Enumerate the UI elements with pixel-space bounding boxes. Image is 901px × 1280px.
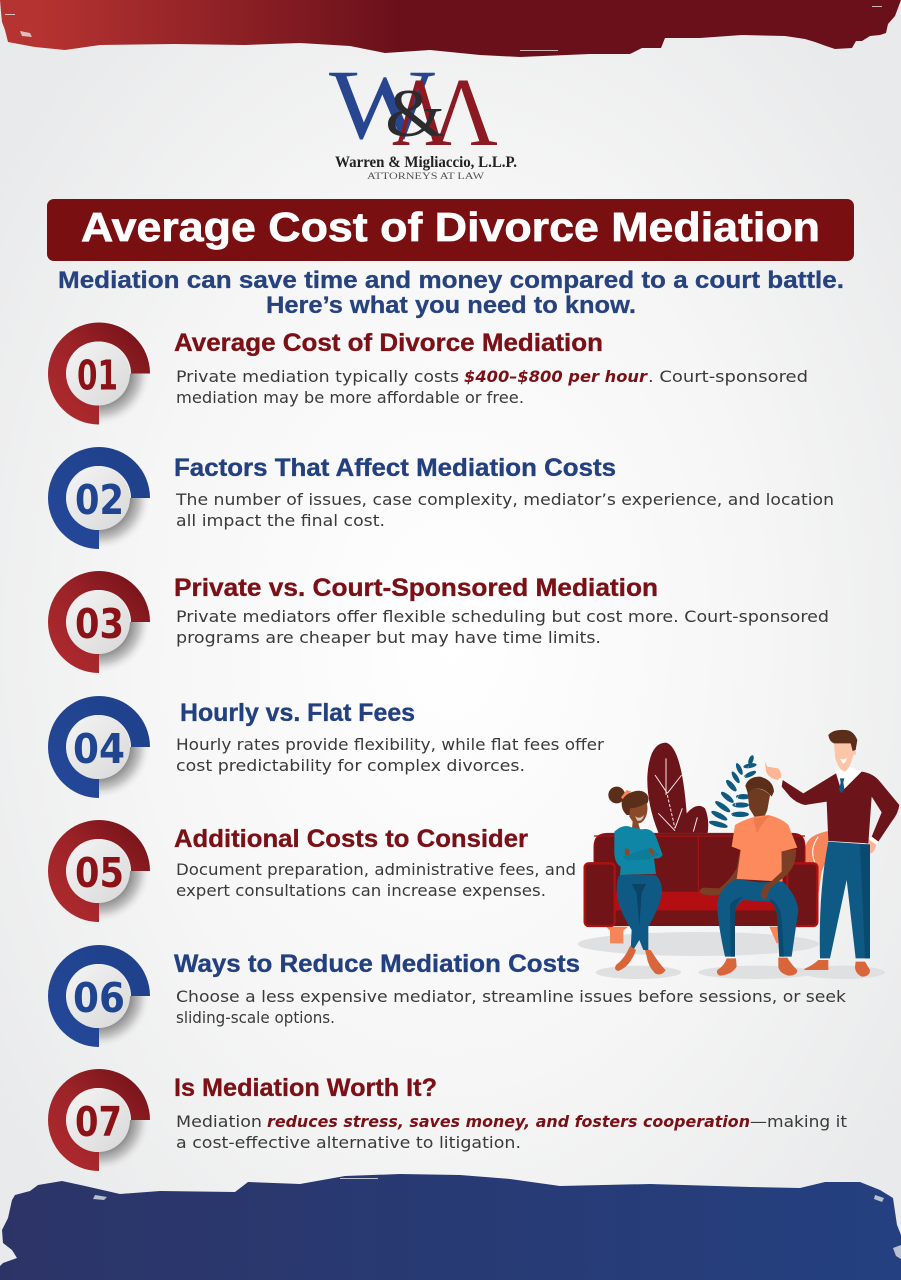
illustration: three people at a sofa bbox=[578, 730, 899, 979]
body 07: a cost-effective alternative to litigation. bbox=[176, 1134, 521, 1152]
badge 07 bbox=[48, 1069, 150, 1171]
body 05: expert consultations can increase expenses. bbox=[176, 882, 546, 900]
woman bbox=[608, 787, 666, 974]
heading 01: Average Cost of Divorce Mediation bbox=[174, 329, 603, 357]
fern bbox=[708, 755, 757, 830]
step 07 bbox=[48, 1069, 847, 1171]
plants bbox=[647, 743, 828, 895]
heading 05: Additional Costs to Consider bbox=[174, 825, 528, 853]
bottom brush banner bbox=[0, 1174, 901, 1280]
floor shadows bbox=[578, 932, 885, 979]
logo mark: W & M: Λ bbox=[392, 59, 448, 167]
badge 01: 01 bbox=[77, 352, 118, 400]
body 01: mediation may be more affordable or free. bbox=[176, 389, 524, 407]
step 05 bbox=[48, 820, 576, 922]
logo mark: W & M: W bbox=[329, 49, 436, 160]
badge 01 bbox=[48, 322, 150, 424]
maroon leaves bbox=[647, 743, 708, 835]
body 02: The number of issues, case complexity, mediator’s experience, and location bbox=[175, 491, 834, 509]
badge 05: 05 bbox=[75, 849, 124, 897]
body 06: Choose a less expensive mediator, streamline issues before sessions, or seek bbox=[176, 988, 846, 1006]
body 06: sliding-scale options. bbox=[176, 1009, 335, 1027]
body 06 bbox=[176, 988, 846, 1027]
body 07: reduces stress, saves money, and fosters cooperation bbox=[267, 1113, 750, 1131]
step 01 bbox=[48, 322, 808, 424]
body 05: Document preparation, administrative fees, and bbox=[176, 861, 576, 879]
badge 04 bbox=[48, 696, 150, 798]
sofa bbox=[585, 833, 817, 943]
subtitle: Here’s what you need to know. bbox=[266, 292, 636, 319]
body 02 bbox=[175, 491, 834, 530]
badge 02 bbox=[48, 447, 150, 549]
body 01: Private mediation typically costs bbox=[176, 368, 459, 386]
logo mark: W & M: Λ bbox=[430, 59, 498, 167]
badge 02: 02 bbox=[75, 476, 124, 524]
title banner bbox=[47, 199, 854, 261]
body 04: Hourly rates provide flexibility, while flat fees offer bbox=[176, 736, 605, 754]
orange leaf bbox=[805, 831, 828, 895]
body 01 bbox=[176, 368, 808, 407]
step 02 bbox=[48, 447, 834, 549]
standing man bbox=[765, 730, 899, 977]
heading 03: Private vs. Court-Sponsored Mediation bbox=[174, 574, 658, 602]
step 06 bbox=[48, 945, 846, 1047]
body 04: cost predictability for complex divorces. bbox=[176, 757, 525, 775]
seated man bbox=[699, 777, 798, 976]
badge 04: 04 bbox=[73, 725, 125, 773]
body 07 bbox=[176, 1113, 847, 1152]
body 02: all impact the final cost. bbox=[176, 512, 385, 530]
heading 07: Is Mediation Worth It? bbox=[174, 1074, 437, 1102]
top brush banner bbox=[0, 0, 901, 57]
badge 05 bbox=[48, 820, 150, 922]
body 03: Private mediators offer flexible scheduling but cost more. Court-sponsored bbox=[176, 608, 829, 626]
body 04 bbox=[176, 736, 605, 775]
logo mark: W & M: & bbox=[385, 75, 445, 151]
step 04 bbox=[48, 696, 605, 798]
heading 04: Hourly vs. Flat Fees bbox=[180, 699, 415, 727]
body 01: . Court-sponsored bbox=[648, 368, 808, 386]
badge 07: 07 bbox=[75, 1098, 122, 1146]
logo mark: W & M bbox=[329, 49, 498, 167]
badge 03 bbox=[48, 571, 150, 673]
step 03 bbox=[48, 571, 829, 673]
firm tagline: ATTORNEYS AT LAW bbox=[367, 172, 484, 182]
body 05 bbox=[176, 861, 576, 900]
subtitle bbox=[58, 267, 844, 319]
heading 06: Ways to Reduce Mediation Costs bbox=[174, 950, 580, 978]
badge 03: 03 bbox=[75, 600, 124, 648]
body 01: $400–$800 per hour bbox=[464, 368, 648, 386]
body 07: —making it bbox=[750, 1113, 847, 1131]
subtitle: Mediation can save time and money compared to a court battle. bbox=[58, 267, 844, 294]
body 03: programs are cheaper but may have time limits. bbox=[176, 629, 601, 647]
title: Average Cost of Divorce Mediation bbox=[81, 204, 820, 250]
badge 06: 06 bbox=[73, 974, 125, 1022]
body 03 bbox=[176, 608, 829, 647]
logo bbox=[329, 49, 517, 182]
badge 06 bbox=[48, 945, 150, 1047]
firm name: Warren & Migliaccio, L.L.P. bbox=[335, 154, 517, 171]
body 07: Mediation bbox=[176, 1113, 262, 1131]
heading 02: Factors That Affect Mediation Costs bbox=[174, 454, 616, 482]
